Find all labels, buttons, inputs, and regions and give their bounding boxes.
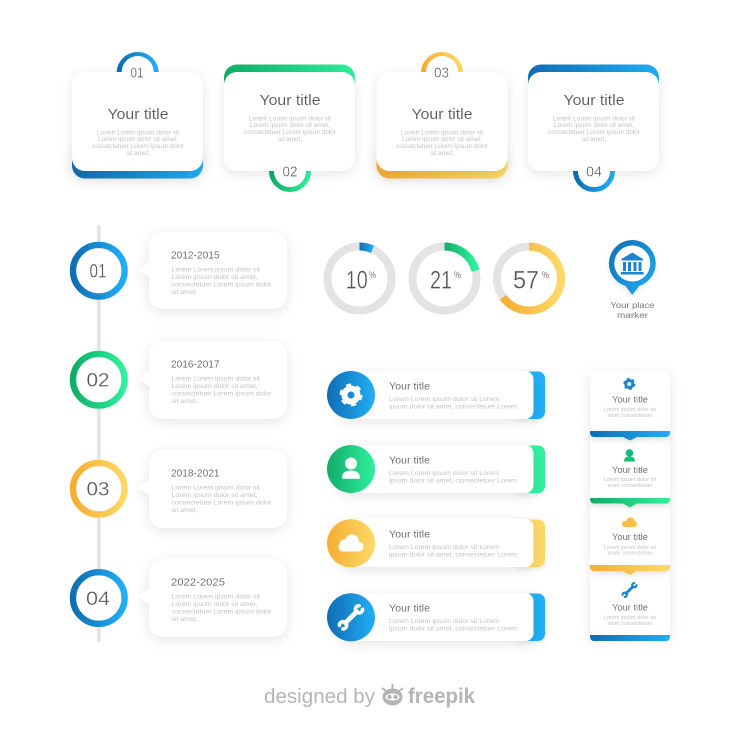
value arc — [503, 246, 561, 310]
row title: Your title — [389, 530, 430, 540]
card text: sit amet, — [582, 136, 606, 143]
icon: user — [624, 449, 635, 462]
timeline step 01 — [73, 232, 287, 309]
card body — [528, 72, 659, 171]
icon disc — [327, 445, 375, 493]
date range: 2016-2017 — [171, 358, 220, 370]
card body — [590, 432, 670, 499]
badge ring 03 — [424, 54, 460, 92]
card title: Your title — [612, 394, 648, 404]
description: sit amet, — [172, 289, 198, 296]
row text: Lorem Lorem ipsum dolor sit Lorem — [389, 544, 500, 551]
panel: card 01 — [72, 54, 203, 178]
date range: 2018-2021 — [171, 468, 220, 480]
step number: 04 — [86, 588, 110, 610]
list row: cloud — [327, 519, 545, 567]
card text — [604, 477, 656, 489]
speech bubble — [138, 559, 287, 637]
card text: Lorem Lorem ipsum dolor sit — [97, 129, 179, 136]
card text: consectetuer Lorem ipsum dolor — [396, 143, 489, 150]
colour tab — [515, 446, 545, 493]
date range: 2012-2015 — [171, 250, 220, 262]
description: Lorem ipsum dolor sit amet, — [172, 383, 258, 390]
card body — [590, 570, 670, 636]
row text — [389, 396, 518, 410]
value arc — [360, 246, 372, 249]
card text — [92, 129, 185, 157]
card text: consectetuer Lorem ipsum dolor — [92, 143, 185, 150]
card title: Your title — [260, 93, 320, 109]
step number: 01 — [90, 260, 106, 282]
card title: Your title — [612, 532, 648, 542]
track — [412, 246, 476, 310]
icon disc — [327, 593, 375, 641]
list row: user — [327, 445, 545, 493]
row text: ipsum dolor sit amet, consectetuer Lorem — [389, 626, 518, 632]
value: 57 — [513, 266, 539, 294]
card body — [72, 72, 203, 171]
card title: Your title — [564, 93, 624, 109]
description: consectetuer Lorem ipsum dolor — [172, 282, 272, 289]
stacked card: settings — [590, 371, 670, 440]
icon: cloud — [622, 518, 637, 527]
card title: Your title — [612, 602, 648, 612]
colour tab — [515, 520, 545, 567]
icon: gear — [624, 379, 634, 389]
icon disc — [327, 519, 375, 567]
badge circle — [122, 56, 154, 88]
card title: Your title — [412, 107, 472, 123]
description: Lorem Lorem ipsum dolor sit — [172, 485, 260, 492]
marker label: Your place — [610, 301, 655, 310]
icon: gear — [341, 385, 361, 405]
date range: 2022-2025 — [171, 576, 225, 588]
colour band — [590, 498, 670, 508]
badge ring 04 — [576, 152, 612, 190]
row body — [340, 445, 534, 493]
card text: Lorem ipsum dolor sit — [604, 545, 656, 551]
row text: Lorem Lorem ipsum dolor sit Lorem — [389, 618, 500, 625]
card text: Lorem ipsum dolor sit amet, — [554, 122, 634, 129]
card title: Your title — [108, 107, 168, 123]
step number: 03 — [86, 478, 110, 500]
card text — [604, 545, 656, 556]
card text: sit amet, — [430, 150, 454, 157]
card colour band — [72, 145, 203, 178]
badge circle — [426, 56, 458, 88]
card text: sit amet, — [278, 136, 302, 143]
row text — [389, 618, 518, 632]
donut chart 57% — [497, 246, 561, 310]
description: sit amet, — [172, 398, 198, 405]
row body — [340, 593, 534, 641]
pin centre — [614, 246, 650, 282]
freepik: freepik — [408, 685, 475, 708]
percent sign: % — [454, 270, 461, 281]
timeline step 02 — [73, 341, 287, 419]
row text: Lorem Lorem ipsum dolor sit Lorem — [389, 470, 500, 477]
step circle — [73, 463, 125, 514]
description: Lorem Lorem ipsum dolor sit — [172, 267, 260, 274]
description: Lorem ipsum dolor sit amet, — [172, 601, 258, 608]
description: Lorem ipsum dolor sit amet, — [172, 274, 258, 281]
badge number: 02 — [282, 164, 298, 180]
description: sit amet, — [172, 616, 198, 623]
timeline axis — [97, 225, 101, 642]
card text — [244, 115, 337, 143]
card colour band — [376, 145, 508, 178]
colour band — [590, 635, 670, 641]
card body — [590, 500, 670, 566]
step circle — [73, 572, 125, 624]
card colour band — [528, 64, 659, 104]
row body — [340, 371, 534, 419]
place marker — [609, 240, 656, 320]
card body — [590, 371, 670, 432]
row body — [340, 519, 534, 567]
designed by: designed by — [264, 686, 375, 708]
row text: Lorem Lorem ipsum dolor sit Lorem — [389, 396, 500, 403]
stacked card: cloud — [590, 500, 670, 575]
percent sign: % — [369, 270, 376, 281]
row text — [389, 470, 518, 484]
card text: Lorem Lorem ipsum dolor sit — [553, 115, 635, 122]
card text: Lorem ipsum dolor sit — [604, 615, 656, 621]
speech bubble — [138, 232, 287, 309]
row text: ipsum dolor sit amet, consectetuer Lorem — [389, 404, 518, 410]
watermark — [264, 684, 475, 708]
card text — [604, 407, 656, 419]
card title: Your title — [612, 465, 648, 475]
marker label: marker — [617, 311, 648, 320]
card text: consectetuer Lorem ipsum dolor — [548, 129, 641, 136]
card text: sit amet, — [126, 150, 150, 157]
description: consectetuer Lorem ipsum dolor — [172, 391, 272, 398]
pin — [609, 240, 656, 295]
card colour band — [224, 64, 355, 104]
badge number: 03 — [434, 64, 449, 82]
value: 10 — [346, 266, 368, 294]
icon: freepik mascot — [382, 684, 403, 706]
card text: Lorem Lorem ipsum dolor sit — [401, 129, 483, 136]
icon: wrench — [623, 583, 636, 597]
row title: Your title — [389, 382, 430, 392]
description: Lorem ipsum dolor sit amet, — [172, 492, 258, 499]
badge ring 02 — [272, 152, 308, 190]
stacked card: user — [590, 432, 670, 508]
card text: amet, consectetuer — [608, 413, 653, 419]
card text: Lorem ipsum dolor sit — [604, 477, 656, 483]
colour tab — [515, 372, 545, 419]
panel: card 03 — [376, 54, 508, 178]
card text: Lorem ipsum dolor sit amet, — [98, 136, 178, 143]
description — [172, 594, 272, 623]
description: Lorem Lorem ipsum dolor sit — [172, 376, 260, 383]
card text: Lorem ipsum dolor sit — [604, 407, 656, 413]
step circle — [73, 245, 125, 296]
marker label — [610, 301, 655, 320]
card text: Lorem ipsum dolor sit amet, — [402, 136, 482, 143]
colour band — [590, 431, 670, 440]
list row: settings — [327, 371, 545, 419]
step circle — [73, 354, 125, 406]
speech bubble — [138, 450, 287, 528]
donut chart 21% — [412, 246, 476, 310]
donut chart 10% — [328, 246, 392, 310]
description: consectetuer Lorem ipsum dolor — [172, 609, 272, 616]
icon disc — [327, 371, 375, 419]
card text — [604, 615, 656, 627]
card body — [224, 72, 355, 171]
icon: cloud — [338, 534, 364, 552]
stacked card: wrench — [590, 570, 670, 641]
timeline step 04 — [73, 559, 287, 637]
card text: amet, consectetuer — [608, 550, 653, 556]
description: sit amet, — [172, 507, 198, 514]
description: Lorem Lorem ipsum dolor sit — [172, 594, 260, 601]
icon: wrench — [339, 606, 363, 629]
description — [172, 267, 272, 296]
card text — [396, 129, 489, 157]
card text: amet, consectetuer — [608, 621, 653, 627]
track — [328, 246, 392, 310]
value arc — [444, 246, 476, 271]
value: 21 — [430, 266, 452, 294]
badge circle — [274, 155, 306, 187]
badge ring 01 — [119, 54, 156, 92]
track — [497, 246, 561, 310]
row title: Your title — [389, 604, 430, 614]
speech bubble — [138, 341, 287, 419]
description — [172, 485, 272, 514]
colour band — [590, 565, 670, 575]
card body — [376, 72, 508, 171]
icon: bank — [621, 252, 644, 274]
panel: card 04 — [528, 64, 659, 190]
description — [172, 376, 272, 405]
row text — [389, 544, 518, 558]
card text: amet, consectetuer — [608, 483, 653, 489]
card text: consectetuer Lorem ipsum dolor — [244, 129, 337, 136]
description: consectetuer Lorem ipsum dolor — [172, 500, 272, 507]
badge circle — [578, 155, 610, 187]
row text: ipsum dolor sit amet, consectetuer Lorem — [389, 478, 518, 484]
panel: card 02 — [224, 64, 355, 190]
timeline step 03 — [73, 450, 287, 528]
step number: 02 — [86, 370, 110, 392]
percent sign: % — [542, 270, 549, 281]
badge number: 04 — [586, 164, 602, 180]
row text: ipsum dolor sit amet, consectetuer Lorem — [389, 552, 518, 558]
badge number: 01 — [130, 64, 144, 82]
icon: user — [342, 458, 360, 479]
row title: Your title — [389, 456, 430, 466]
list row: wrench — [327, 593, 545, 641]
card text: Lorem Lorem ipsum dolor sit — [249, 115, 331, 122]
card text: Lorem ipsum dolor sit amet, — [250, 122, 330, 129]
colour tab — [515, 594, 545, 641]
card text — [548, 115, 641, 143]
